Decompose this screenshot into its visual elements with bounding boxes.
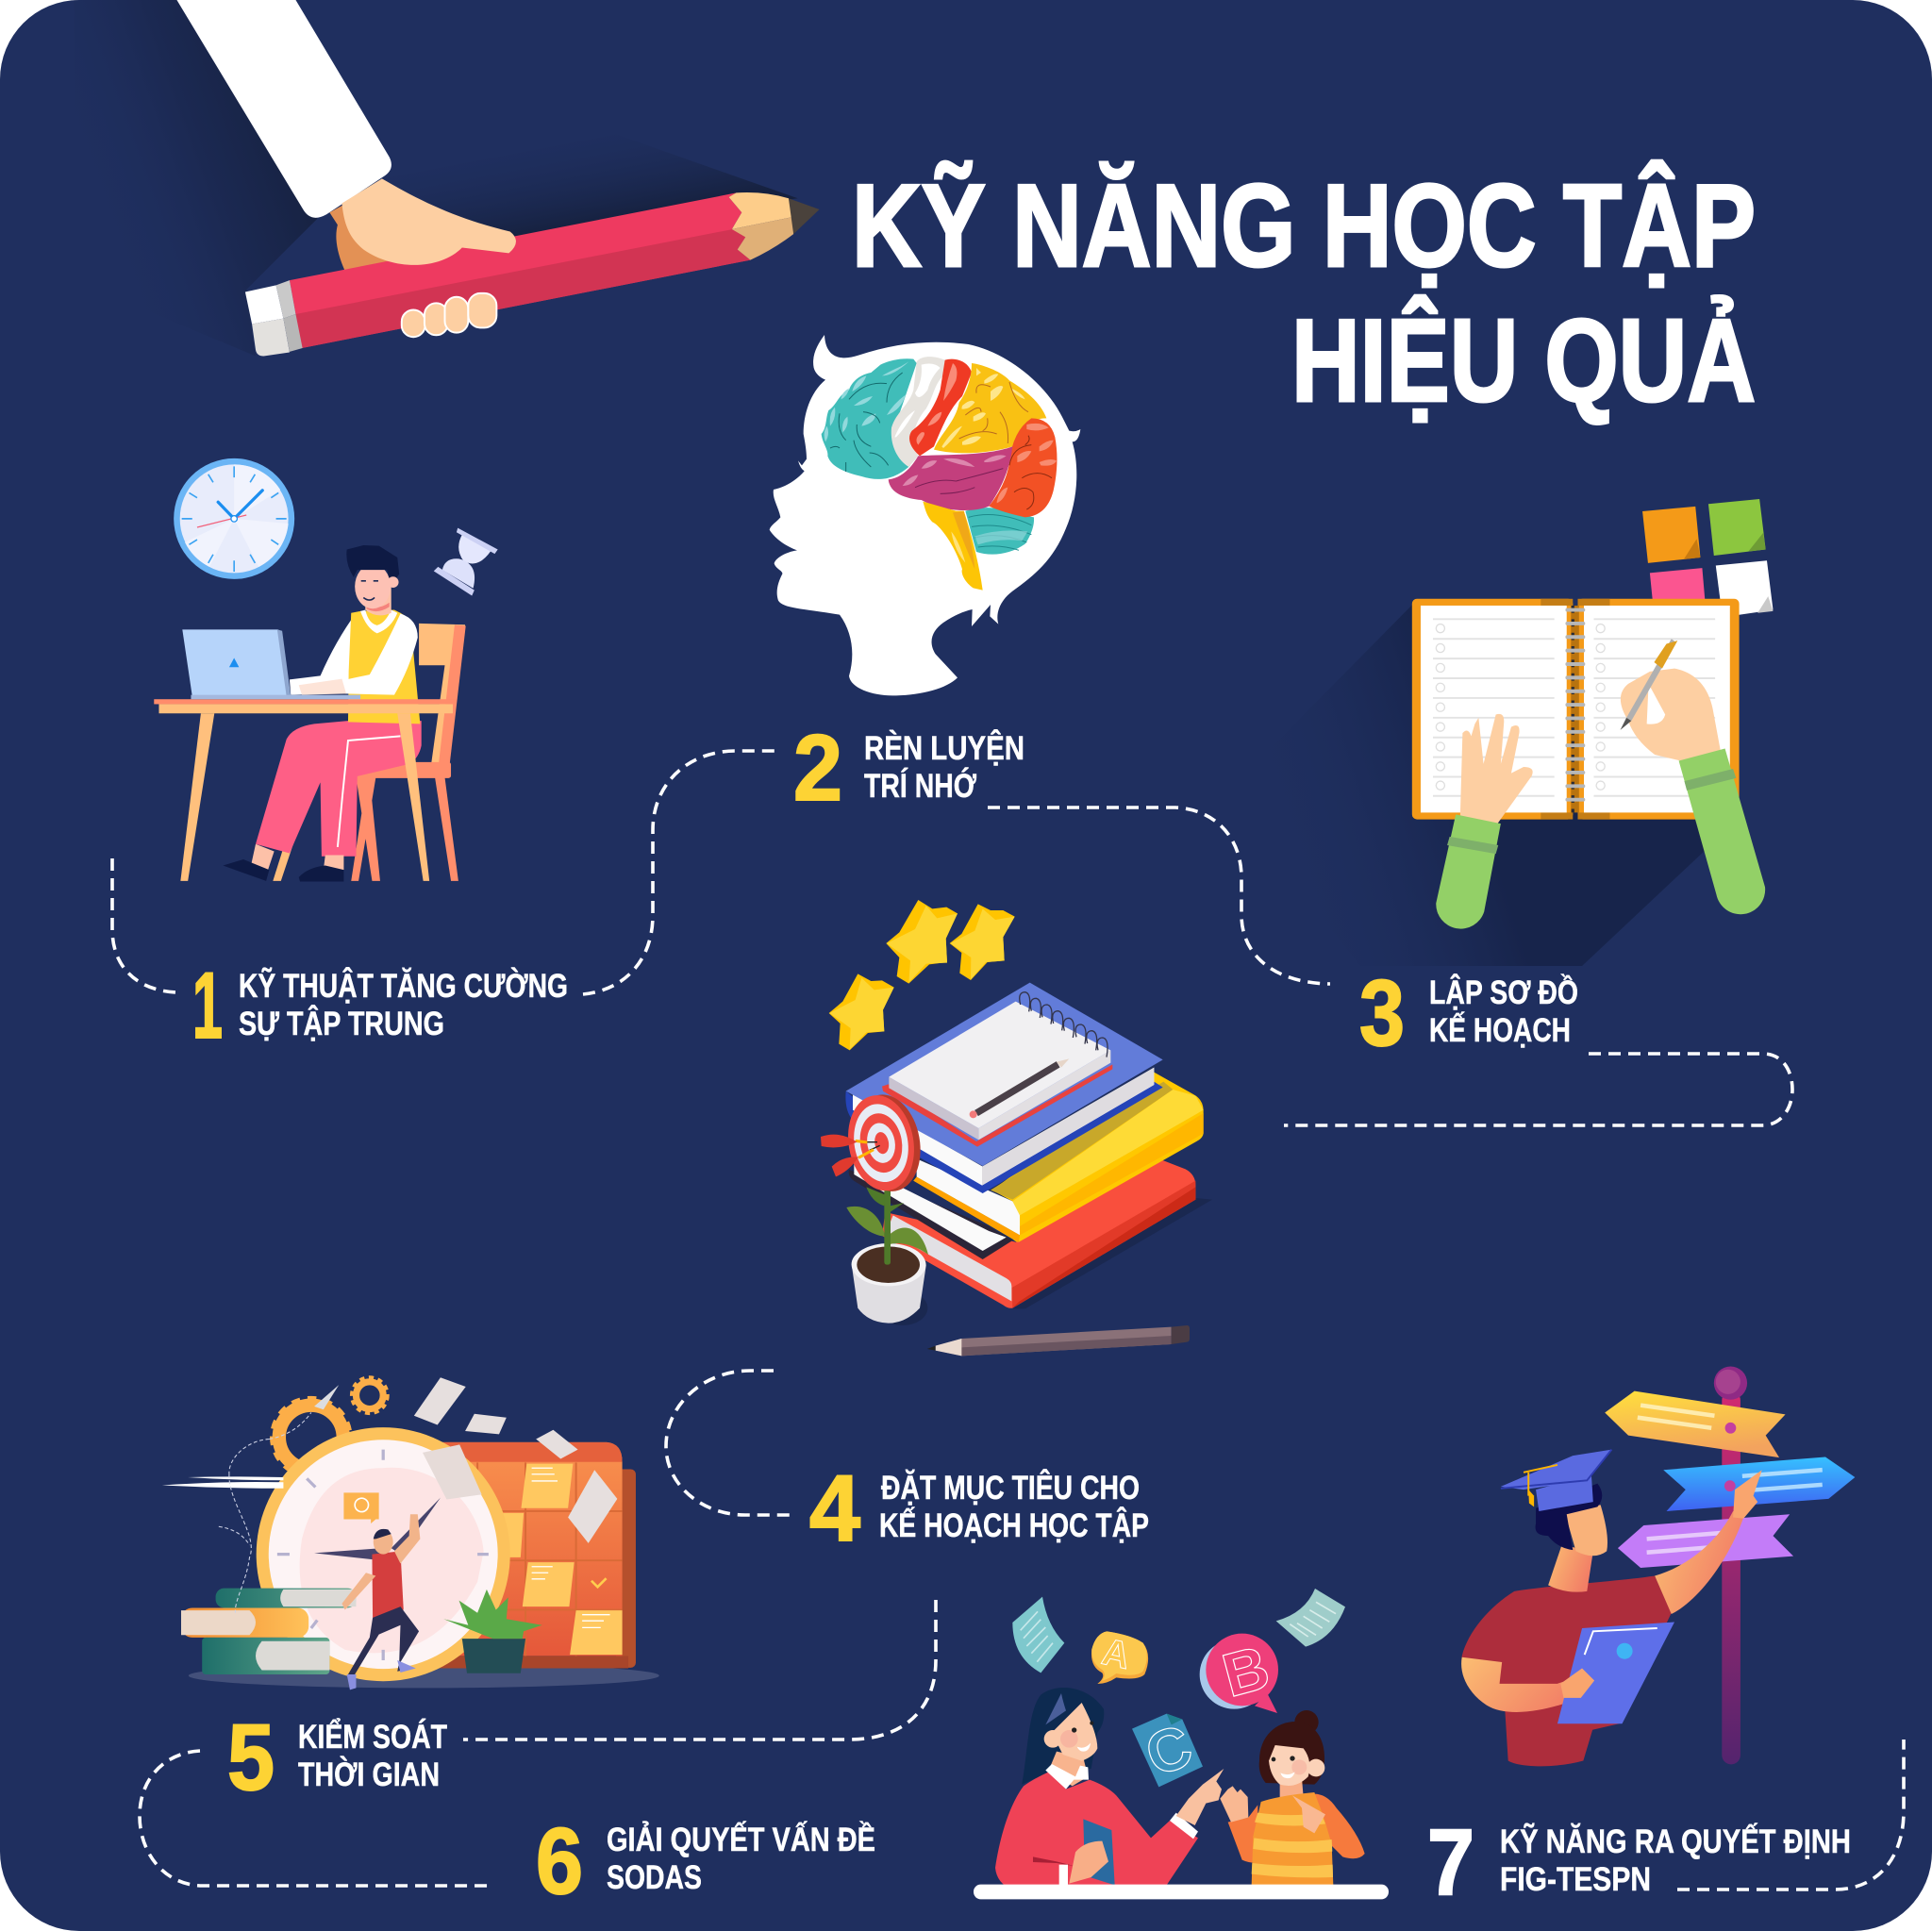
floating paper left [1012,1597,1064,1673]
step 1 label: KỸ THUẬT TĂNG CƯỜNG [239,967,568,1005]
step 3 label [1359,960,1578,1065]
step 3 label: KẾ HOẠCH [1429,1011,1571,1049]
icon: hourglass [434,528,498,596]
icon: head silhouette with colourful brain [770,335,1080,695]
red book [882,1158,1212,1308]
illustration: graduate at signpost [1461,1366,1855,1766]
icon: open notebook with hands [1224,499,1774,966]
step 7 label: FIG-TESPN [1500,1861,1651,1898]
illustration: student at laptop [154,545,466,882]
notepad with spiral and pencil [882,992,1112,1147]
step 7 label [1427,1809,1851,1914]
connector dashes [112,751,1904,1889]
stars [829,900,1015,1050]
step 2 label: 2 [793,715,842,820]
blue book with pages [845,983,1163,1193]
target with darts [821,1090,927,1197]
step 3 label: LẬP SƠ ĐỒ [1429,974,1578,1011]
title [852,160,1756,426]
girl [1220,1710,1365,1885]
step 6 label: 6 [536,1808,583,1913]
illustration: teacher and girl talking [974,1589,1389,1899]
step 7 label: KỸ NĂNG RA QUYẾT ĐỊNH [1500,1823,1851,1860]
step 4 label: 4 [809,1456,860,1560]
woman [995,1688,1224,1889]
step 3 label: 3 [1359,960,1405,1065]
step 6 label: SODAS [607,1859,702,1896]
step 5 label [227,1705,447,1809]
step 1 label: 1 [192,953,223,1057]
icon: wall clock [174,458,294,579]
step 4 label: KẾ HOẠCH HỌC TẬP [879,1507,1149,1544]
illustration: running man clock calendar [162,1377,659,1690]
step 2 label: TRÍ NHỚ [864,767,976,805]
illustration: stack of books with target and plant [821,900,1212,1356]
floating paper right [1276,1589,1345,1647]
step 5 label: THỜI GIAN [298,1756,440,1793]
step 1 label [192,953,568,1057]
speech bubble A: A [1098,1631,1134,1677]
step 2 label [793,715,1024,820]
step 5 label: 5 [227,1705,275,1809]
pot and plant [846,1187,928,1325]
step 7 label: 7 [1427,1809,1474,1914]
step 6 label [536,1808,875,1913]
card C: C [1138,1712,1201,1790]
title: KỸ NĂNG HỌC TẬP [852,160,1756,291]
step 4 label [809,1456,1149,1560]
table [974,1885,1389,1899]
yellow book [913,1073,1204,1242]
step 2 label: RÈN LUYỆN [864,729,1024,767]
step 5 label: KIỂM SOÁT [298,1718,447,1756]
black book [849,1163,1012,1259]
speech bubble A [1091,1631,1148,1684]
pencil on table [927,1325,1190,1356]
step 4 label: ĐẶT MỤC TIÊU CHO [881,1469,1140,1507]
icon: giant hand holding pencil [74,0,820,356]
sticky notes [1642,499,1774,615]
title: HIỆU QUẢ [1291,295,1756,426]
step 1 label: SỰ TẬP TRUNG [239,1005,444,1042]
speech bubble B: B [1216,1632,1276,1710]
step 6 label: GIẢI QUYẾT VẤN ĐỀ [607,1821,875,1858]
